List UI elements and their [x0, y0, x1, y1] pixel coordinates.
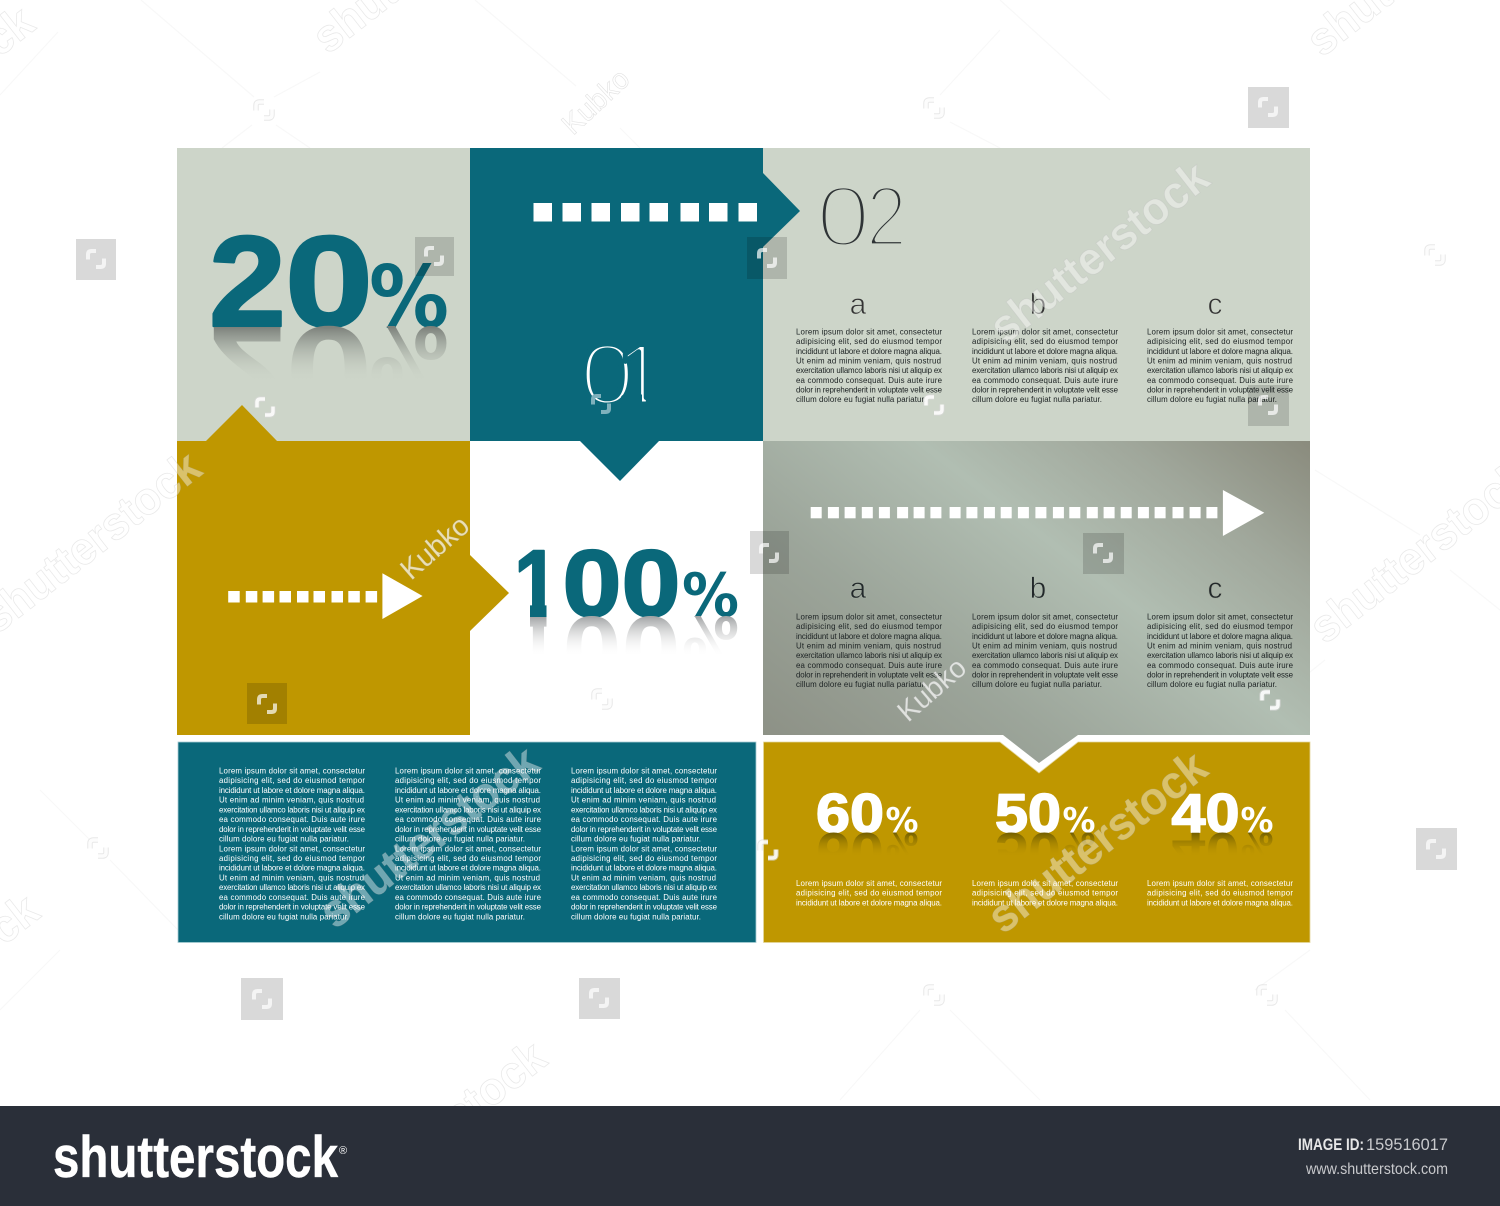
watermark: shutterstock text: shutterstock [977, 740, 1217, 943]
text column c: incididunt ut labore et dolore magna aliqua. [1147, 347, 1293, 356]
text column 3: ea commodo consequat. Duis aute irure [571, 815, 718, 824]
text column 1: adipisicing elit, sed do eiusmod tempor [219, 854, 365, 863]
number 01 [580, 327, 666, 423]
figure: 50 percent [995, 782, 1096, 844]
image id: IMAGE ID: [1298, 1136, 1364, 1154]
text column 3: dolor in reprehenderit in voluptate velit esse [571, 903, 718, 912]
text column 2: Lorem ipsum dolor sit amet, consectetur [395, 844, 541, 853]
text column a: cillum dolore eu fugiat nulla pariatur. [796, 680, 926, 689]
text column 3: Lorem ipsum dolor sit amet, consectetur [571, 766, 717, 776]
text column c: cillum dolore eu fugiat nulla pariatur. [1147, 395, 1277, 404]
text column c: ea commodo consequat. Duis aute irure [1147, 376, 1294, 385]
column headings a b c [850, 572, 1222, 605]
watermark: Kubko text: Kubko [892, 652, 973, 728]
figure: 20 percent: 0 [285, 210, 373, 354]
caption under 40 percent [1147, 879, 1293, 907]
watermark icons: grey boxes [76, 87, 1457, 1020]
text column b: Lorem ipsum dolor sit amet, consectetur [972, 328, 1118, 336]
text column c: cillum dolore eu fugiat nulla pariatur. [1147, 680, 1277, 689]
figure: 50 percent: % [1062, 801, 1096, 841]
text column c [1147, 328, 1294, 404]
column headings a b c [850, 288, 1222, 321]
panel: top-right grey with 02 [763, 148, 1310, 441]
text column b: cillum dolore eu fugiat nulla pariatur. [972, 680, 1102, 689]
number 02: 2 [866, 169, 907, 265]
watermark: shutterstock text: shutterstock [309, 735, 549, 938]
text column c: Ut enim ad minim veniam, quis nostrud [1147, 356, 1292, 366]
text column a: Lorem ipsum dolor sit amet, consectetur [796, 328, 942, 336]
caption under 60 percent: Lorem ipsum dolor sit amet, consectetur [796, 879, 942, 888]
figure: 40 percent: 40 [1172, 782, 1240, 844]
text column 1: dolor in reprehenderit in voluptate velit esse [219, 903, 366, 912]
text column 3: exercitation ullamco laboris nisi ut aliquip ex [571, 883, 717, 892]
text column 3: incididunt ut labore et dolore magna aliqua. [571, 786, 717, 795]
caption under 60 percent: adipisicing elit, sed do eiusmod tempor [796, 889, 942, 898]
figure: 100 percent: 1 [514, 531, 559, 637]
caption under 50 percent: Lorem ipsum dolor sit amet, consectetur [972, 879, 1118, 888]
text column b: adipisicing elit, sed do eiusmod tempor [972, 622, 1118, 631]
text column 2: cillum dolore eu fugiat nulla pariatur. [395, 912, 525, 921]
footer bar [0, 1106, 1500, 1206]
text column b [972, 328, 1119, 404]
text column b: adipisicing elit, sed do eiusmod tempor [972, 337, 1118, 346]
text column 2: dolor in reprehenderit in voluptate velit esse [395, 825, 542, 834]
text column 1: exercitation ullamco laboris nisi ut aliquip ex [219, 805, 365, 814]
column headings a b c: c [1208, 288, 1222, 321]
text column c: dolor in reprehenderit in voluptate velit esse [1147, 386, 1294, 394]
text column 3: cillum dolore eu fugiat nulla pariatur. [571, 835, 701, 844]
text column a: ea commodo consequat. Duis aute irure [796, 661, 943, 670]
text column 2: adipisicing elit, sed do eiusmod tempor [395, 854, 541, 863]
text column c: incididunt ut labore et dolore magna aliqua. [1147, 632, 1293, 641]
number 01: 0 [580, 327, 634, 423]
text column 1: Ut enim ad minim veniam, quis nostrud [219, 796, 364, 805]
text column 2: Ut enim ad minim veniam, quis nostrud [395, 874, 540, 882]
figure: 20 percent [209, 210, 449, 354]
long dotted arrow [811, 490, 1264, 536]
text column 3: incididunt ut labore et dolore magna aliqua. [571, 864, 717, 873]
reflection of 50 percent [995, 821, 1096, 883]
text column c: exercitation ullamco laboris nisi ut aliquip ex [1147, 366, 1293, 375]
text column 1: cillum dolore eu fugiat nulla pariatur. [219, 912, 349, 921]
text column a: adipisicing elit, sed do eiusmod tempor [796, 622, 942, 631]
text column c: adipisicing elit, sed do eiusmod tempor [1147, 337, 1293, 346]
text column 1: incididunt ut labore et dolore magna aliqua. [219, 786, 365, 795]
column headings a b c: b [1030, 288, 1046, 321]
text column 3: adipisicing elit, sed do eiusmod tempor [571, 854, 717, 863]
text column 3: Lorem ipsum dolor sit amet, consectetur [571, 844, 717, 853]
text column 2: ea commodo consequat. Duis aute irure [395, 893, 542, 902]
text column 2 [395, 766, 542, 921]
text column b: Ut enim ad minim veniam, quis nostrud [972, 642, 1117, 650]
number 01: 1 [617, 327, 665, 423]
text column a: exercitation ullamco laboris nisi ut aliquip ex [796, 651, 942, 660]
caption under 50 percent: adipisicing elit, sed do eiusmod tempor [972, 889, 1118, 898]
text column b: exercitation ullamco laboris nisi ut aliquip ex [972, 366, 1118, 375]
panel: bottom-left teal text block [178, 742, 756, 942]
caption under 40 percent: Lorem ipsum dolor sit amet, consectetur [1147, 879, 1293, 888]
text column a: cillum dolore eu fugiat nulla pariatur. [796, 395, 926, 404]
watermark: shutterstock text: shutterstock [979, 150, 1219, 353]
number 02: 0 [816, 169, 870, 265]
text column 1: ea commodo consequat. Duis aute irure [219, 893, 366, 902]
number 02 [816, 169, 907, 265]
reflection of 60 percent: % [886, 824, 918, 864]
reflection of 100 percent: % [682, 602, 739, 672]
text column a: Lorem ipsum dolor sit amet, consectetur [796, 612, 942, 622]
text column 2: exercitation ullamco laboris nisi ut aliquip ex [395, 805, 541, 814]
website: www.shutterstock.com [1305, 1161, 1448, 1178]
panel: bottom-right gold with percentages [764, 742, 1310, 942]
reflection of 50 percent: 50 [995, 821, 1061, 883]
text column a: incididunt ut labore et dolore magna aliqua. [796, 632, 942, 641]
figure: 40 percent [1172, 782, 1274, 844]
panel: mid-right gradient grey [763, 441, 1310, 763]
text column 1: adipisicing elit, sed do eiusmod tempor [219, 776, 365, 785]
reflection of 40 percent: 40 [1172, 821, 1240, 883]
text column 3: dolor in reprehenderit in voluptate velit esse [571, 825, 718, 834]
text column 2: incididunt ut labore et dolore magna aliqua. [395, 864, 541, 873]
text column a [796, 328, 943, 404]
panel: gold with arrows [177, 405, 509, 735]
text column a: Ut enim ad minim veniam, quis nostrud [796, 356, 941, 366]
reflection of 40 percent: % [1240, 824, 1274, 864]
text column b: ea commodo consequat. Duis aute irure [972, 661, 1119, 670]
caption under 50 percent [972, 879, 1118, 907]
dotted arrow [228, 573, 423, 619]
text column 3 [571, 766, 718, 921]
text column c: Lorem ipsum dolor sit amet, consectetur [1147, 612, 1293, 622]
reflection of 20 percent: % [369, 306, 449, 406]
text column a: adipisicing elit, sed do eiusmod tempor [796, 337, 942, 346]
text column 3: ea commodo consequat. Duis aute irure [571, 893, 718, 902]
reflection of 100 percent: 1 [514, 596, 559, 702]
column headings a b c: a [850, 288, 867, 321]
column headings a b c: b [1030, 572, 1046, 605]
reflection of 100 percent: 00 [562, 596, 680, 702]
figure: 100 percent: % [682, 561, 739, 631]
figure: 60 percent: % [886, 801, 918, 841]
panel: teal with 01 and arrows [470, 148, 800, 481]
text column 3: adipisicing elit, sed do eiusmod tempor [571, 776, 717, 785]
text column 1: ea commodo consequat. Duis aute irure [219, 815, 366, 824]
reflection of 60 percent: 60 [816, 821, 884, 883]
panel: top-left grey with 20 percent [177, 148, 470, 443]
reflection of 100 percent [514, 596, 739, 702]
caption under 60 percent: incididunt ut labore et dolore magna aliqua. [796, 898, 942, 907]
reflection of 20 percent: 0 [285, 299, 373, 443]
figure: 100 percent [514, 531, 739, 637]
text column 1: dolor in reprehenderit in voluptate velit esse [219, 825, 366, 834]
text column b: exercitation ullamco laboris nisi ut aliquip ex [972, 651, 1118, 660]
figure: 20 percent: 2 [209, 210, 286, 354]
text column 2: Lorem ipsum dolor sit amet, consectetur [395, 766, 541, 776]
text column a: dolor in reprehenderit in voluptate velit esse [796, 386, 943, 394]
watermark icons: outlined glyphs [90, 100, 1443, 1003]
text column b: incididunt ut labore et dolore magna aliqua. [972, 347, 1118, 356]
text column 1: Lorem ipsum dolor sit amet, consectetur [219, 844, 365, 853]
caption under 40 percent: incididunt ut labore et dolore magna aliqua. [1147, 898, 1293, 907]
text column a: Ut enim ad minim veniam, quis nostrud [796, 642, 941, 650]
column headings a b c: a [850, 572, 867, 605]
watermark: Kubko text: Kubko [556, 63, 636, 141]
figure: 20 percent: % [369, 248, 449, 348]
text column 1: Ut enim ad minim veniam, quis nostrud [219, 874, 364, 882]
caption under 50 percent: incididunt ut labore et dolore magna aliqua. [972, 898, 1118, 907]
caption under 60 percent [796, 879, 942, 907]
text column a [796, 612, 943, 689]
text column a: incididunt ut labore et dolore magna aliqua. [796, 347, 942, 356]
text column b: cillum dolore eu fugiat nulla pariatur. [972, 395, 1102, 404]
text column 1: cillum dolore eu fugiat nulla pariatur. [219, 835, 349, 844]
image id [1298, 1136, 1448, 1154]
figure: 60 percent [816, 782, 918, 844]
image id: 159516017 [1366, 1136, 1448, 1154]
text column c: dolor in reprehenderit in voluptate velit esse [1147, 670, 1294, 680]
text column 3: Ut enim ad minim veniam, quis nostrud [571, 874, 716, 882]
text column 2: Ut enim ad minim veniam, quis nostrud [395, 796, 540, 805]
watermark: Kubko text [395, 63, 973, 728]
registered mark: ® [339, 1145, 347, 1157]
figure: 50 percent: 50 [995, 782, 1061, 844]
reflection of 40 percent [1172, 821, 1274, 883]
text column b: dolor in reprehenderit in voluptate velit esse [972, 386, 1119, 394]
reflection of 20 percent [209, 299, 449, 443]
text column 3: Ut enim ad minim veniam, quis nostrud [571, 796, 716, 805]
text column 2: dolor in reprehenderit in voluptate velit esse [395, 903, 542, 912]
text column a: ea commodo consequat. Duis aute irure [796, 376, 943, 385]
text column a: dolor in reprehenderit in voluptate velit esse [796, 670, 943, 680]
text column c: adipisicing elit, sed do eiusmod tempor [1147, 622, 1293, 631]
caption under 40 percent: adipisicing elit, sed do eiusmod tempor [1147, 889, 1293, 898]
text column 2: adipisicing elit, sed do eiusmod tempor [395, 776, 541, 785]
text column 1: Lorem ipsum dolor sit amet, consectetur [219, 766, 365, 776]
text column 3: cillum dolore eu fugiat nulla pariatur. [571, 912, 701, 921]
text column c: ea commodo consequat. Duis aute irure [1147, 661, 1294, 670]
text column c [1147, 612, 1294, 689]
text column c: Lorem ipsum dolor sit amet, consectetur [1147, 328, 1293, 336]
dotted arrow squares [534, 203, 757, 222]
text column b: ea commodo consequat. Duis aute irure [972, 376, 1119, 385]
text column b: Lorem ipsum dolor sit amet, consectetur [972, 612, 1118, 622]
text column 1: exercitation ullamco laboris nisi ut aliquip ex [219, 883, 365, 892]
figure: 60 percent: 60 [816, 782, 884, 844]
text column 2: incididunt ut labore et dolore magna aliqua. [395, 786, 541, 795]
text column 1: incididunt ut labore et dolore magna aliqua. [219, 864, 365, 873]
column headings a b c: c [1208, 572, 1222, 605]
text column a: exercitation ullamco laboris nisi ut aliquip ex [796, 366, 942, 375]
text column 2: ea commodo consequat. Duis aute irure [395, 815, 542, 824]
text column 3: exercitation ullamco laboris nisi ut aliquip ex [571, 805, 717, 814]
text column 2: exercitation ullamco laboris nisi ut aliquip ex [395, 883, 541, 892]
footer logo: shutterstock [53, 1125, 339, 1190]
text column b [972, 612, 1119, 689]
figure: 100 percent: 00 [562, 531, 680, 637]
text column b: incididunt ut labore et dolore magna aliqua. [972, 632, 1118, 641]
text column 1 [219, 766, 366, 921]
text column b: dolor in reprehenderit in voluptate velit esse [972, 670, 1119, 680]
text column 2: cillum dolore eu fugiat nulla pariatur. [395, 835, 525, 844]
text column b: Ut enim ad minim veniam, quis nostrud [972, 356, 1117, 366]
text column c: Ut enim ad minim veniam, quis nostrud [1147, 642, 1292, 650]
watermark: Kubko text: Kubko [395, 510, 476, 586]
reflection of 20 percent: 2 [209, 299, 286, 443]
reflection of 60 percent [816, 821, 918, 883]
text column c: exercitation ullamco laboris nisi ut aliquip ex [1147, 651, 1293, 660]
reflection of 50 percent: % [1062, 824, 1096, 864]
figure: 40 percent: % [1240, 801, 1274, 841]
